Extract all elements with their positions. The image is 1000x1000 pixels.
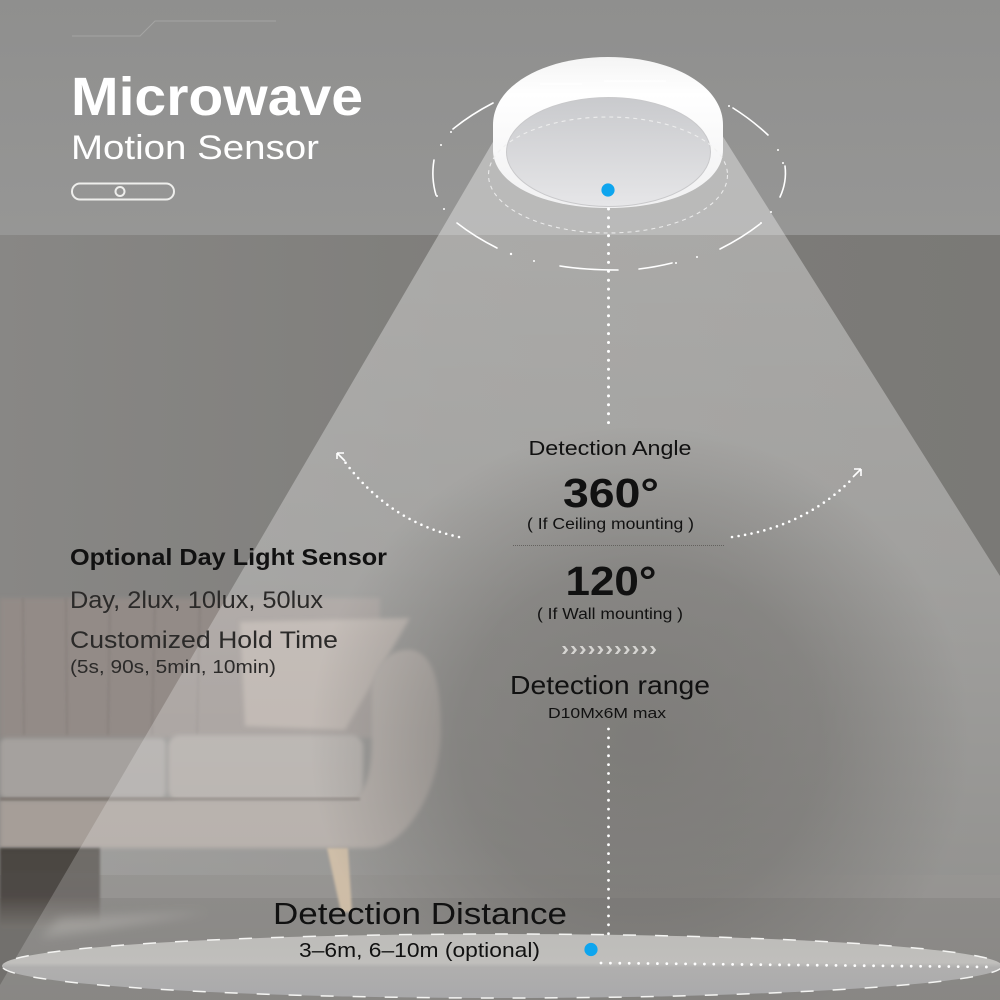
- subtitle: Motion Sensor: [71, 129, 319, 167]
- dotted vertical line lower: [607, 729, 610, 936]
- 120 value: 120°: [566, 558, 656, 604]
- divider: [513, 545, 724, 547]
- dotted vertical line upper: [607, 209, 610, 428]
- detection range: Detection range: [510, 670, 710, 700]
- optional sensor text: Optional Day Light Sensor: [70, 544, 387, 570]
- ceiling note: ( If Ceiling mounting ): [527, 516, 694, 533]
- hold time options: (5s, 90s, 5min, 10min): [70, 657, 276, 677]
- outer detection arcs: [433, 103, 785, 270]
- title: [71, 67, 363, 167]
- detection distance: [273, 896, 567, 962]
- lamp lens: [506, 98, 710, 206]
- floor highlight streak: [40, 912, 210, 938]
- 360 value: 360°: [563, 470, 659, 516]
- icon: sensor pill: [72, 184, 174, 200]
- detection angle block: Detection Angle: [528, 437, 692, 460]
- sofa: [0, 598, 441, 928]
- dashed sensor ring: [488, 117, 728, 233]
- decorative header line: [72, 21, 276, 36]
- hold time: Customized Hold Time: [70, 627, 338, 654]
- distance value: 3–6m, 6–10m (optional): [299, 939, 540, 962]
- range value: D10Mx6M max: [548, 705, 667, 722]
- cone central shading: [300, 400, 1000, 1000]
- detection distance: Detection Distance: [273, 896, 567, 931]
- ceiling band: [0, 0, 1000, 235]
- title: Microwave: [71, 67, 363, 127]
- sensor dot top: [601, 183, 615, 197]
- sensor dot bottom: [584, 943, 598, 956]
- dotted horizontal line: [601, 963, 992, 967]
- wall note: ( If Wall mounting ): [537, 606, 683, 623]
- detection angle block: [527, 437, 694, 623]
- detection range: [510, 670, 710, 722]
- floor detection ellipse: [2, 934, 1000, 998]
- ceiling lamp: [493, 57, 723, 208]
- arrow: left dotted: [337, 453, 459, 537]
- room background: [0, 235, 1000, 1000]
- lux options: Day, 2lux, 10lux, 50lux: [70, 587, 323, 614]
- arrow: right dotted: [732, 469, 861, 537]
- optional sensor text: [70, 544, 387, 677]
- chevron row: [562, 646, 656, 654]
